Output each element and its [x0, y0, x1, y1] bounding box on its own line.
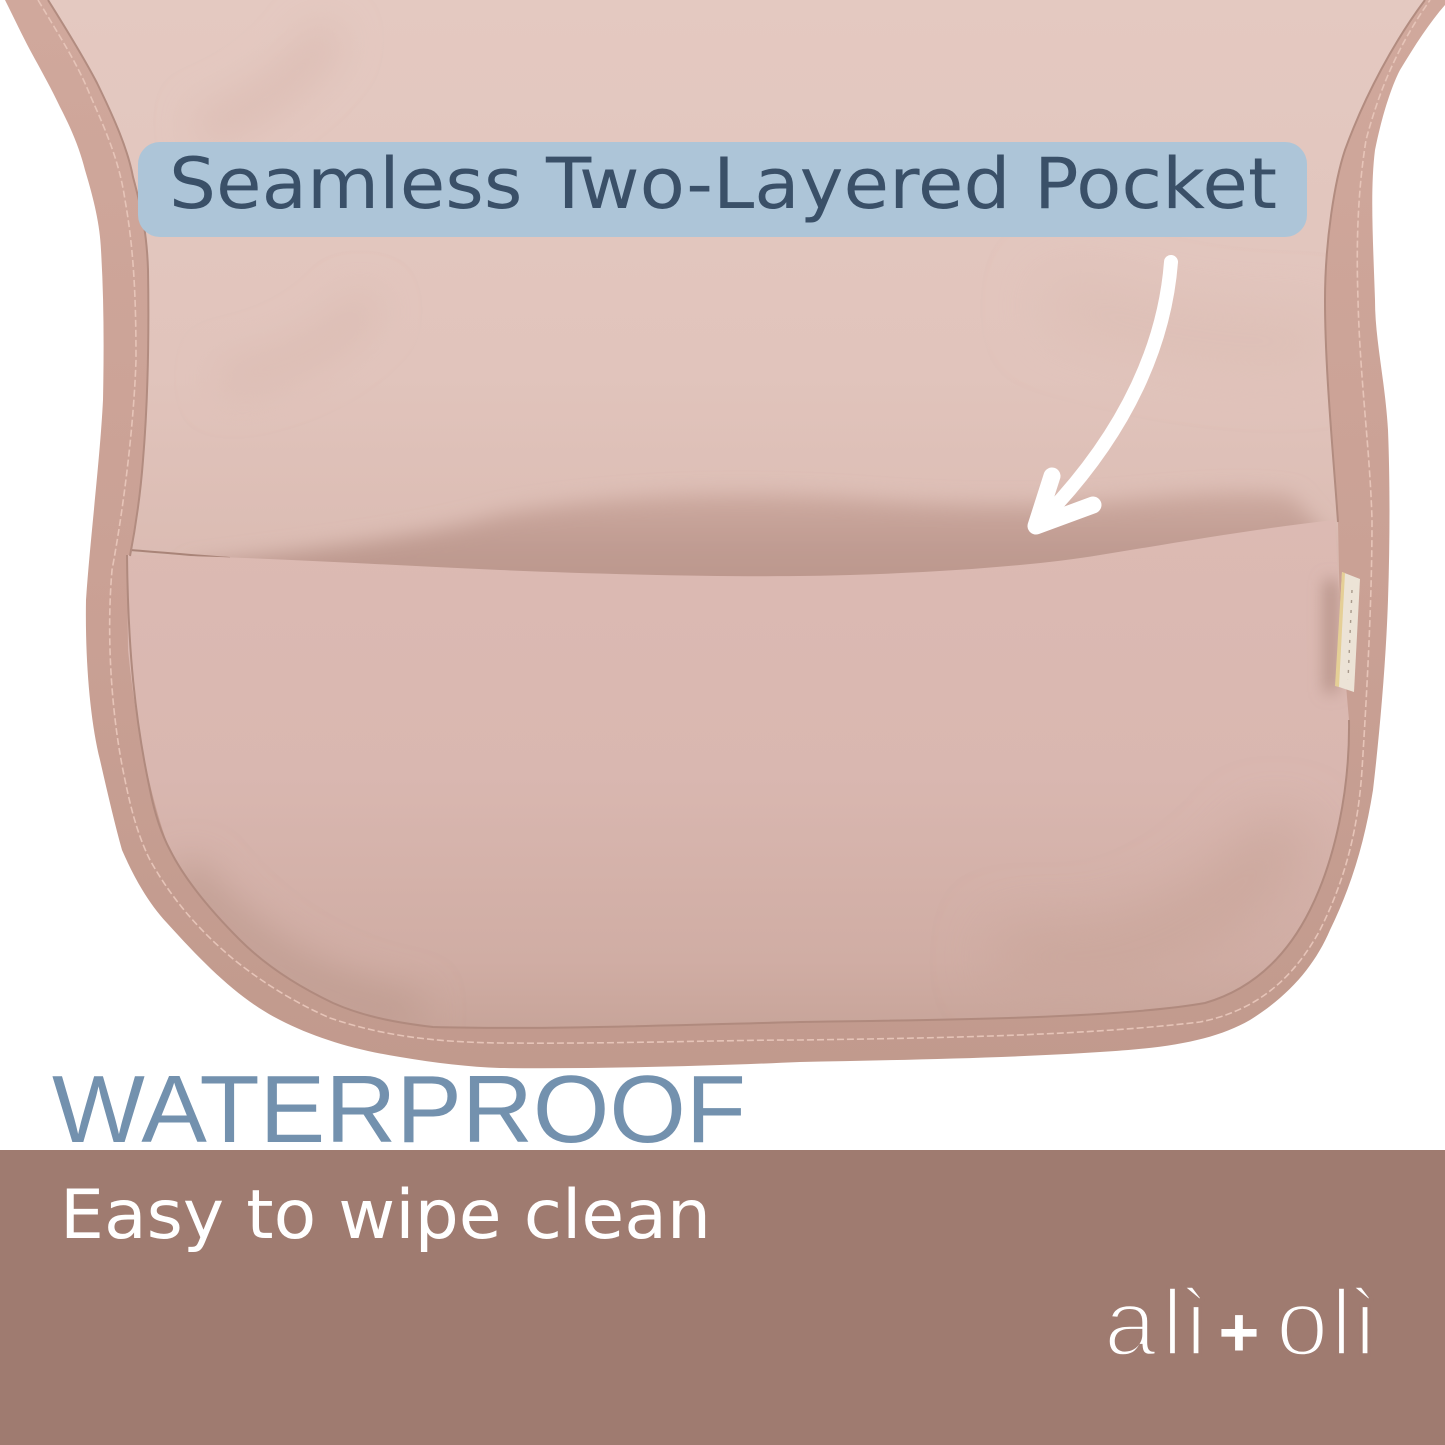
pocket panel — [100, 510, 1380, 1040]
logo: ali + oli: olì — [1276, 1270, 1378, 1375]
callout pill — [138, 142, 1307, 237]
pocket inner edge outline — [127, 555, 1349, 1028]
right inner edge outline — [1325, 0, 1425, 522]
sewn label tag — [1335, 572, 1360, 692]
callout heading: Seamless Two-Layered Pocket — [138, 142, 1307, 237]
logo: ali + oli: + — [1219, 1293, 1259, 1371]
upper fabric panel — [0, 0, 1445, 620]
logo: ali + oli — [1104, 1270, 1378, 1375]
bib: product photo illustration — [0, 0, 1445, 1068]
bib binding edge — [5, 0, 1445, 1068]
shadow above the pocket opening — [213, 488, 1320, 576]
shadow beside tag — [1326, 580, 1336, 692]
stitching — [38, 0, 1430, 1043]
callout text: Seamless Two-Layered Pocket — [169, 143, 1277, 225]
subheading: Easy to wipe clean: Easy to wipe clean — [60, 1176, 711, 1255]
bottom band — [0, 1150, 1445, 1445]
upper inner edge outline — [48, 0, 148, 556]
logo: ali + oli: alì — [1104, 1270, 1209, 1375]
arrow pointing to the pocket — [1036, 262, 1171, 526]
pocket seam line — [130, 550, 230, 558]
heading: WATERPROOF: WATERPROOF — [52, 1056, 746, 1163]
